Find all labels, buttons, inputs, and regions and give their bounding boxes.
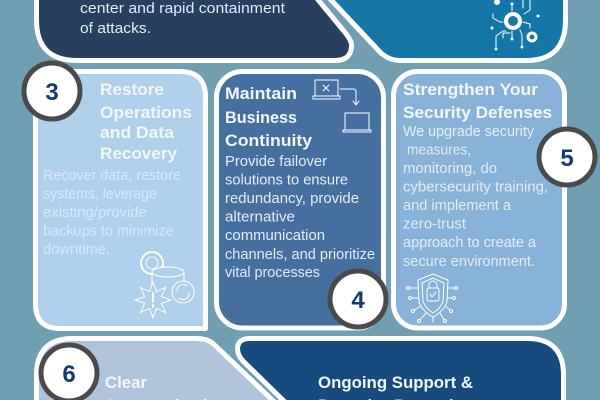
number 3: 3 — [45, 79, 59, 106]
icon: gear, database and alert — [135, 252, 194, 318]
body text: failover: communication — [225, 228, 325, 244]
heading: clear communication — [105, 373, 227, 400]
panel: step 7, ongoing support — [238, 338, 564, 400]
body text: failover: alternative — [225, 210, 295, 226]
heading: maintain business continuity — [225, 84, 313, 150]
badge circle 5 — [539, 129, 595, 185]
panel: top right, blue — [322, 0, 566, 60]
heading: maintain business continuity: Maintain — [225, 84, 297, 103]
body text: failover: channels, and prioritize — [225, 247, 375, 263]
badge circle 6 — [41, 345, 97, 400]
body text: recover data: Recover data, restore — [43, 168, 181, 184]
heading: maintain business continuity: Business — [225, 108, 297, 127]
body text: recover data: systems, leverage — [43, 186, 157, 202]
panel: step 5, strengthen defenses — [394, 72, 595, 328]
body text: upgrade security: We upgrade security — [403, 124, 535, 140]
heading: strengthen your security defenses — [403, 80, 552, 122]
panel: step 6, clear communication — [36, 338, 285, 400]
heading: restore operations and data recovery: Recovery — [100, 144, 178, 163]
icon: shield with padlock — [406, 274, 458, 322]
badge circle 3 — [24, 63, 80, 119]
body text: upgrade security: measures, — [407, 142, 471, 158]
panel: step 3, restore operations — [24, 63, 206, 328]
body text: failover: vital processes — [225, 265, 320, 281]
heading: clear communication: Clear — [105, 373, 147, 392]
panel shape: lavender blue — [36, 338, 285, 400]
badge: number 3 — [24, 63, 80, 119]
heading: ongoing support and proactive protection: Ongoing Support & — [318, 373, 473, 392]
panel shape: light blue — [36, 72, 206, 328]
body text: containment: center and rapid containment — [80, 1, 285, 17]
body text: upgrade security: cybersecurity training, — [403, 180, 548, 196]
badge circle 4 — [330, 271, 386, 327]
badge: number 5 — [539, 129, 595, 185]
heading: restore operations and data recovery: Operations — [100, 103, 192, 122]
body text: upgrade security: monitoring, do — [403, 161, 497, 177]
body text: recover data: downtime. — [43, 242, 110, 258]
panel: step 2 continuation, dark — [36, 0, 352, 60]
number 5: 5 — [560, 145, 574, 172]
heading: restore operations and data recovery: Restore — [100, 80, 164, 99]
body text: failover: redundancy, provide — [225, 191, 359, 207]
number 6: 6 — [62, 361, 76, 388]
panel shape: dark — [36, 0, 352, 60]
body text: upgrade security — [403, 124, 548, 270]
body text: failover: solutions to ensure — [225, 172, 348, 188]
panel shape: blue — [322, 0, 566, 60]
badge: number 6 — [41, 345, 97, 400]
panel shape: soft blue — [394, 72, 564, 328]
heading: restore operations and data recovery: and Data — [100, 123, 175, 142]
body text: recover data — [43, 168, 181, 258]
badge: number 4 — [330, 271, 386, 327]
body text: containment — [80, 1, 285, 37]
heading: ongoing support and proactive protection — [318, 373, 473, 400]
panel shape: mid blue — [216, 72, 384, 328]
body text: failover — [225, 154, 375, 281]
heading: strengthen your security defenses: Security Defenses — [403, 103, 552, 122]
panel: step 4, business continuity — [216, 72, 386, 328]
icon: circuit node — [491, 0, 539, 50]
body text: recover data: backups to minimize — [43, 224, 174, 240]
panel shape: navy — [238, 338, 564, 400]
body text: recover data: existing/provide — [43, 205, 147, 221]
body text: upgrade security: and implement a — [403, 198, 512, 214]
heading: maintain business continuity: Continuity — [225, 131, 313, 150]
body text: failover: Provide failover — [225, 154, 327, 170]
number 4: 4 — [351, 287, 365, 314]
body text: containment: of attacks. — [80, 21, 151, 37]
heading: restore operations and data recovery — [100, 80, 192, 163]
body text: upgrade security: approach to create a — [403, 235, 537, 251]
heading: strengthen your security defenses: Strengthen Your — [403, 80, 538, 99]
body text: upgrade security: zero-trust — [403, 216, 466, 232]
icon: failover laptops — [313, 80, 371, 132]
body text: upgrade security: secure environment. — [403, 254, 535, 270]
